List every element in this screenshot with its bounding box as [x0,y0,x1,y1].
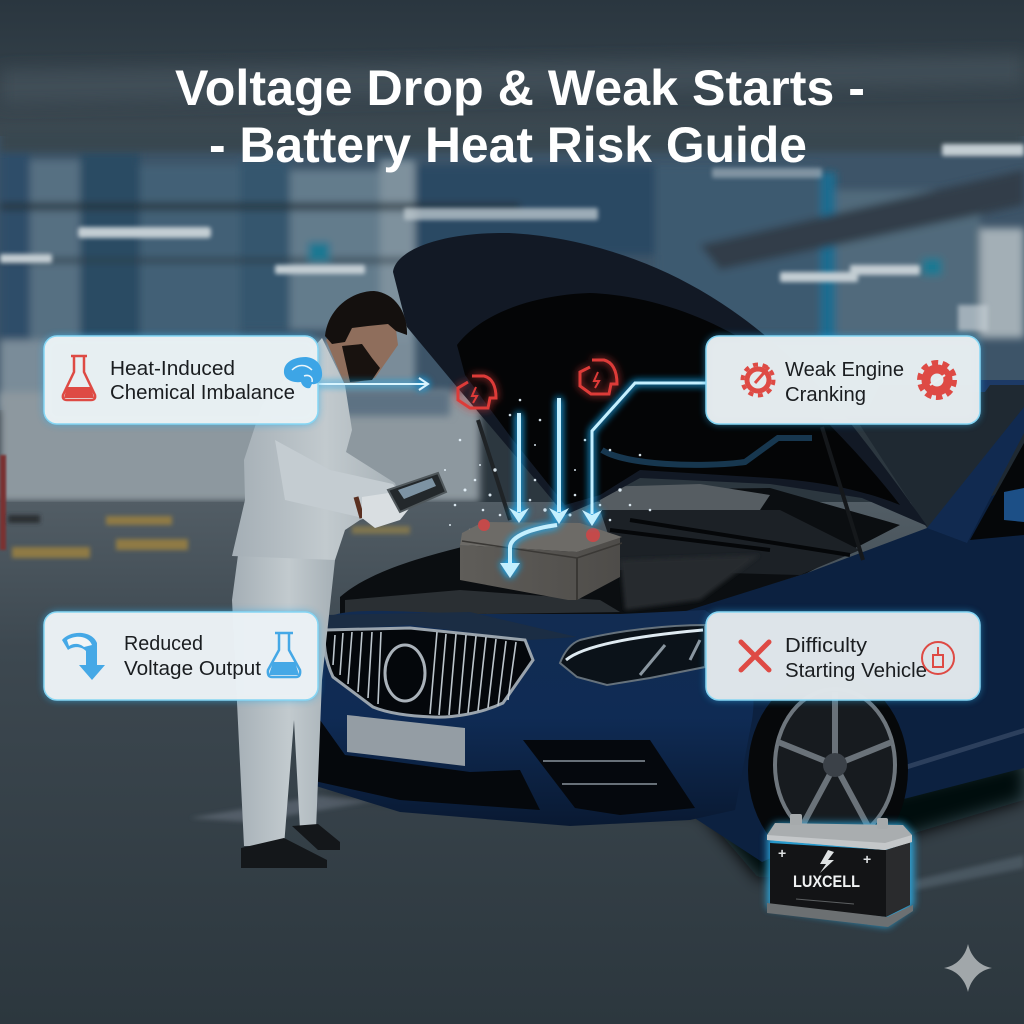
icon: red gear [920,362,954,398]
car [302,233,1024,868]
torso [232,338,402,560]
icon: sparkle watermark [944,944,992,992]
title [175,60,865,173]
icon: red circled plug [922,642,954,674]
title: - Battery Heat Risk Guide [209,117,807,173]
icon: red cross [741,642,769,670]
icon: blue brain [284,357,322,388]
arrow 3 [582,383,706,526]
mechanic [232,291,446,868]
arrows into battery [500,383,706,578]
arrow 2 [549,398,569,524]
panel: reduced voltage output [44,612,318,700]
connector: top left panel [318,378,428,390]
icon: engine warning right [580,360,617,394]
neck and face [326,322,398,385]
text: difficulty starting vehicle: Difficulty [785,635,867,657]
icon: engine warning left [458,376,496,408]
arrow 1 [509,413,529,523]
panel: heat-induced chemical imbalance [44,336,322,424]
legs [232,540,335,846]
panel: difficulty starting vehicle [706,612,980,700]
icon: blue flask [268,633,300,677]
battery brand: LUXCELL [793,872,860,891]
text: difficulty starting vehicle: Starting Vehicle [785,660,927,682]
car body side [660,480,1024,862]
icon: falling gauge arrow [62,633,105,680]
title: Voltage Drop & Weak Starts - [175,60,865,116]
hair [325,291,407,344]
glove [362,492,412,528]
product: Luxcell battery [767,814,914,927]
shoes [241,838,327,868]
text: reduced voltage output: Reduced [124,633,203,655]
connector: top right panel [980,379,1024,381]
text: weak engine cranking: Weak Engine [785,359,904,381]
connector: bottom right panel [575,656,706,658]
connector: bottom left panel [318,656,422,658]
battery bolt [820,850,834,873]
text: heat-induced: Heat-Induced [110,358,235,380]
product: Luxcell battery: + [863,851,871,867]
warning icons [458,360,617,408]
headlight [560,625,705,685]
lower bumper [303,720,540,810]
battery plus signs: + [778,845,786,861]
car front [302,610,754,826]
engine bay [340,488,900,617]
grille [324,628,533,717]
battery terminals [478,519,600,542]
shadow under car [320,760,1024,880]
panel: weak engine cranking [706,336,980,424]
arm [275,440,405,520]
license plate [347,715,465,766]
diagnostic device [388,473,446,512]
arrow down through battery [500,525,557,578]
battery under hood [460,519,622,600]
text: weak engine cranking: Cranking [785,384,866,406]
text: heat-induced: Chemical Imbalance [110,382,295,404]
text: reduced voltage output: Voltage Output [124,658,261,680]
beard [342,344,380,382]
icon: red gauge gear [742,364,774,396]
car hood underside [393,233,927,560]
icon: red flask [63,356,95,400]
wheel [748,672,908,868]
sparks [444,399,651,531]
